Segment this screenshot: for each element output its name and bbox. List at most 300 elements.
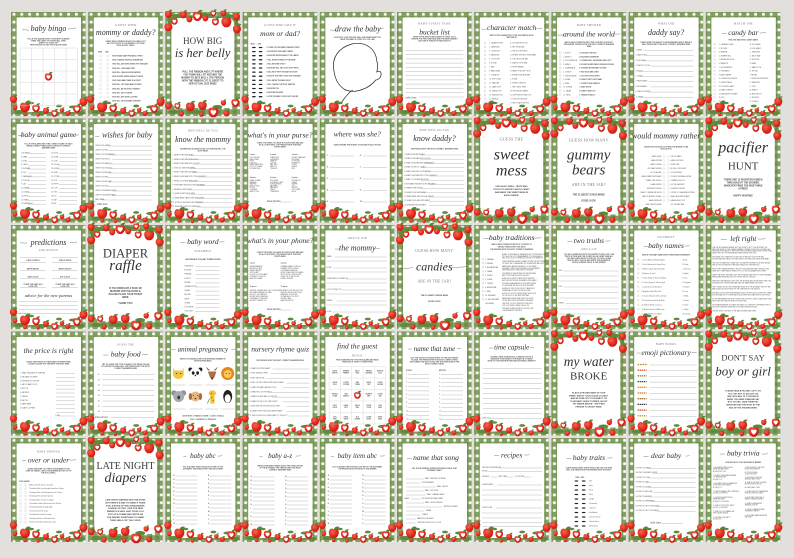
rows: 10. WHAT DOES THE BLACK SHEEP HAVE? bbox=[250, 409, 283, 412]
icon: panda bbox=[188, 368, 202, 379]
wish rows: I HOPE YOU GET YOUR DAD'S bbox=[636, 509, 659, 512]
title: name that tune bbox=[414, 345, 455, 353]
match rows: A. Mia bbox=[683, 258, 687, 262]
point columns: VOICEMAIL MESSAGE bbox=[281, 269, 298, 272]
ruled lines bbox=[406, 50, 464, 97]
panel: dear baby bbox=[628, 438, 706, 543]
instructions: EACH DIAPER. bbox=[504, 194, 519, 197]
question list: WHO CHANGED MORE AS A NEWBORN bbox=[112, 59, 144, 62]
point columns: NAIL POLISH bbox=[250, 184, 260, 187]
answer columns: Q bbox=[285, 488, 287, 490]
instructions: POINTS WINS! bbox=[274, 256, 286, 258]
wish rows: I WISH YOU FEEL... bbox=[95, 176, 110, 178]
point columns: LIPSTICK bbox=[250, 162, 258, 164]
answer columns: D bbox=[251, 488, 253, 490]
answer columns: 2. bbox=[439, 378, 441, 380]
trivia columns: 11. WHAT IS THE MOST COMMON bbox=[745, 481, 766, 484]
point columns: UNREAD EMAILS OVER 20 bbox=[281, 265, 301, 268]
answer columns: P bbox=[208, 483, 210, 485]
title: baby abc bbox=[190, 452, 217, 460]
heading: pacifier bbox=[717, 140, 769, 156]
instructions: ANSWER EACH QUESTION AS YOU SEE AND WILL THE bbox=[180, 148, 226, 150]
words: RPDAIE bbox=[184, 281, 190, 284]
answer columns: B bbox=[173, 479, 175, 481]
question list: I WILL CHANGE THE MOST DIAPERS bbox=[267, 83, 295, 86]
answer columns: K bbox=[251, 516, 253, 518]
choice rows: LISTEN TO GRANDPA ROCKING bbox=[671, 191, 696, 194]
tradition text: AND THE FIRST MONTH CELEBRATED WITH FAMILY bbox=[502, 279, 537, 282]
match rows: L. Wyatt bbox=[683, 308, 689, 311]
answer columns: 7. bbox=[406, 398, 408, 400]
match list: 3. CORDUROY bbox=[489, 50, 501, 52]
instructions: THE CLOSEST GUESS WINS bbox=[421, 295, 449, 297]
trivia columns: 5. HOW MUCH SLEEP DOES A bbox=[713, 496, 732, 499]
bingo grid: LOVES bbox=[378, 394, 383, 396]
fields bbox=[327, 255, 387, 313]
match list: M. HEATH bbox=[750, 89, 758, 92]
bingo grid: SEW bbox=[333, 418, 337, 420]
instructions: BY TASTING OR SMELLING. THE PERSON WITH THE MOST bbox=[102, 365, 151, 368]
trivia columns: A) 2 B) 6 C) 8 bbox=[713, 518, 722, 521]
answer columns: T bbox=[362, 499, 363, 501]
match list: O. MOUNDS bbox=[750, 97, 759, 99]
rows: 8. HOW MANY SIBLINGS DOES SHE HAVE? bbox=[172, 184, 205, 187]
rows: 5. WHAT DOES HE DO FOR WORK? bbox=[404, 170, 431, 173]
country list: 1. CANADA bbox=[485, 258, 495, 261]
heading: BABY'S FIRST YEAR bbox=[418, 22, 451, 26]
answer rows: 14. KANGAROO bbox=[21, 202, 34, 205]
point columns: STICKERS bbox=[270, 180, 278, 182]
answer rows: 13. SWAN bbox=[21, 198, 29, 201]
question list: I AM MORE WILL GET UP AT NIGHT FIRST bbox=[267, 66, 299, 70]
instructions: HOW MUCH DO YOU KNOW ABOUT BABIES bbox=[725, 461, 762, 464]
trait rows bbox=[574, 476, 601, 528]
wish rows: I HOPE YOU SEE bbox=[636, 482, 649, 484]
point columns: SCREENSHOT OF TEXT bbox=[281, 296, 299, 298]
answer rows: 28. EEL bbox=[51, 203, 57, 205]
form: DIRECTIONS: bbox=[482, 507, 493, 509]
instructions: CAN CHECK THINGS OFF AND ENJOY IT bbox=[418, 40, 452, 42]
answer rows: 21. OTTER bbox=[51, 176, 60, 178]
answer columns: V bbox=[285, 508, 287, 510]
tradition text: ON THE FIRST DAY FOR A SWEET LIFE AHEAD bbox=[502, 299, 533, 302]
instructions: THERE ARE 15 PACIFIERS HIDDEN bbox=[724, 178, 763, 182]
instructions: YOUR BABY. WHEN IT FREES, SHOUT bbox=[570, 400, 608, 403]
point columns: MORE THAN ONE THOUSAND bbox=[281, 271, 304, 274]
heading: MATCH THE bbox=[734, 22, 753, 26]
wish rows: I HOPE YOU ALWAYS KNOW bbox=[636, 471, 657, 474]
trivia columns: NEWBORN NEED? bbox=[713, 499, 725, 501]
instructions: FILL IN THE BLANKS WITH THE CORRECT NAME OF EACH bbox=[25, 142, 73, 146]
rows: 1. WHEN IS HIS BIRTHDAY? bbox=[404, 153, 425, 156]
instructions: GOOD LUCK! bbox=[428, 301, 441, 303]
wish rows: I HOPE YOU BECOME bbox=[636, 491, 652, 493]
rows: BABIES IN THE NIGHT bbox=[417, 517, 434, 520]
trivia columns: A) 6 B) 8 C) 12 bbox=[713, 486, 722, 489]
instructions: POINTS WINS! bbox=[274, 146, 286, 148]
answer columns: 3. bbox=[406, 382, 408, 384]
answer columns: J bbox=[251, 512, 252, 514]
heading bbox=[648, 22, 684, 37]
list: D. ELDER WOMEN PASS DOWN ADVICE AND bbox=[579, 63, 615, 66]
tradition text: PLACENTA AFTER THE BIRTH bbox=[502, 309, 522, 312]
fields: LOVE: bbox=[327, 311, 332, 313]
answer columns: T bbox=[208, 499, 209, 501]
instructions: CORRECT ANSWERS WINS bbox=[269, 468, 292, 472]
answer columns: ARTISTS bbox=[439, 369, 446, 372]
question list: I AM MORE SERIOUS ABOUT THE LABOR bbox=[267, 54, 299, 57]
heading bbox=[564, 354, 614, 382]
answer rows: 1. MONKEY bbox=[21, 152, 31, 154]
icon: lion bbox=[221, 367, 234, 380]
panel: know the mommy bbox=[164, 118, 242, 223]
answer columns: J bbox=[328, 511, 329, 513]
bingo grid: YOGA bbox=[367, 406, 372, 409]
trivia columns: 10. HOW MUCH DOES THE bbox=[745, 477, 762, 479]
bingo grid: HAS A bbox=[344, 404, 349, 407]
wish rows: I WISH YOU BECOME... bbox=[95, 181, 113, 183]
answer columns: P bbox=[362, 483, 364, 485]
bingo grid: DRIVES bbox=[332, 394, 338, 396]
answer columns: 11. bbox=[406, 414, 409, 416]
heading: raffle bbox=[109, 258, 142, 274]
instructions: ORIGINATED, PERSON WITH THE MOST CORRECT ANSWERS bbox=[564, 43, 615, 46]
prediction fields: HAIR COLOR bbox=[28, 276, 39, 278]
choice rows: BABY IS A DADDYS BABY bbox=[642, 195, 663, 198]
answer columns: F bbox=[173, 495, 174, 497]
instructions: WHEN YOU HEAR SOMEONE SAY bbox=[727, 398, 760, 401]
match list: A. GOODNIGHT MOON bbox=[510, 42, 528, 44]
icon: koala bbox=[171, 390, 186, 402]
match list: E. SKITTLES bbox=[750, 59, 759, 61]
rows: 11. WHICH DOES FOLLOWED MARY TO SCHOOL? bbox=[250, 414, 288, 417]
answer rows: 9. bbox=[360, 190, 362, 192]
price rows: 10. BABY CLIPPERS bbox=[20, 407, 35, 410]
question list: WHO WILL CRY WHEN BABY IS BORN bbox=[112, 83, 142, 86]
bingo grid: TATTOO bbox=[332, 372, 339, 374]
instructions: USE SIGHT, SMELL, TASTE AND bbox=[496, 185, 528, 188]
icon: apple bbox=[354, 391, 361, 399]
point columns: BOOK bbox=[292, 191, 297, 193]
choice rows bbox=[640, 155, 696, 206]
trivia columns: A) 10 B) 14 C) 18 HOURS bbox=[713, 500, 729, 503]
tradition text: OF THE CHILD ON THE FIRST BIRTHDAY bbox=[502, 294, 529, 297]
bingo grid: CAT bbox=[367, 383, 370, 386]
match list: I. PAYDAY bbox=[750, 73, 758, 76]
point columns: NAIL FILE bbox=[270, 163, 277, 166]
choice rows: GO SHOPPING bbox=[671, 172, 683, 174]
answer columns: F bbox=[251, 496, 252, 498]
rows: 6. WHAT IS HIS FAVORITE TYPE OF MUSIC? bbox=[404, 174, 437, 177]
panel: don't say boy or girl bbox=[705, 329, 782, 437]
match list: 16. HAROLD bbox=[489, 102, 499, 104]
point columns: HAND SANITIZER bbox=[250, 163, 264, 166]
answer rows: 25. OWL bbox=[51, 192, 57, 194]
instructions: TRUTH IS TRUE AND THE OTHER IS A LIE. READ THEM ALL bbox=[565, 255, 613, 258]
point columns: BANDAID bbox=[250, 181, 258, 184]
instructions: FUN. A WORD OF ENCOURAGEMENT, bbox=[106, 504, 145, 507]
panel: what did daddy say bbox=[628, 12, 706, 117]
icon: apple bbox=[45, 72, 53, 81]
trivia columns: 3. HOW MANY TIMES DO BABIES EAT bbox=[713, 482, 737, 485]
instructions: FILL IN THE SQUARES WITH YOUR BEST GUESSES bbox=[27, 38, 70, 40]
answer columns: W bbox=[285, 512, 287, 514]
answer rows: THREE bbox=[558, 302, 564, 304]
wish rows: BABY NAME bbox=[95, 198, 104, 201]
match list: D. WHERE THE WILD THINGS ARE bbox=[510, 54, 536, 56]
match rows: 13. Kate Middleton & William bbox=[642, 312, 663, 316]
story text: RIGHT THEN THE BABY ARRIVED. THE LEFT TWIN CAME FIRST AND THE RIGHT ONE bbox=[712, 268, 769, 270]
tradition text: MOTHERS WEAR A BRACELET WITH A BLUE BEAD bbox=[502, 282, 536, 285]
question list: DAD bbox=[258, 42, 262, 46]
point columns: COINS bbox=[292, 164, 297, 166]
country list: 7. TURKEY bbox=[485, 283, 494, 285]
rows: - WHITNEY HOUSTON TO LOVE bbox=[417, 522, 441, 524]
answer rows: 10. RABBIT bbox=[21, 187, 29, 190]
answer columns: Z bbox=[285, 524, 286, 526]
instructions: PLAYED. THE PERSON WITH THE MOST CORRECT WINS bbox=[411, 358, 458, 362]
point columns: CHAPSTICK bbox=[270, 156, 280, 159]
story text: THE NURSE TOOK THEM RIGHT TO A ROOM ON THE LEFT SIDE OF THE HALL. bbox=[712, 256, 765, 258]
panel: recipes bbox=[473, 438, 551, 543]
instructions: UNSCRAMBLE THE BABY THEMED WORDS bbox=[185, 258, 222, 261]
story text: THE END. ENJOY THE REST OF THE BABY SHOWER RIGHT HERE. bbox=[712, 310, 757, 312]
answer columns: R bbox=[208, 491, 210, 493]
panel: late night diapers bbox=[87, 435, 164, 543]
story text: NOTHING WAS LEFT TO WORRY ABOUT AND EVERYTHING WAS RIGHT IN THE WORLD. bbox=[712, 293, 771, 296]
match list: 13. BABY CHEEKS bbox=[719, 89, 733, 92]
list: 2. MEXICO bbox=[563, 56, 572, 58]
point columns: 3 points bbox=[292, 153, 298, 156]
answer rows: 2. bbox=[327, 166, 329, 168]
question list: WHO HAS A BABY NAME IN A CRAZY bbox=[112, 79, 142, 82]
prediction fields: I THINK THE BABY WILL bbox=[55, 283, 75, 286]
match list: K. PURPLE CRAYON bbox=[510, 82, 527, 84]
tradition text: BABIES ARE GIVEN A SMALL TASTE OF HONEY bbox=[502, 297, 534, 300]
answer columns bbox=[328, 474, 386, 525]
panel: the price is right bbox=[10, 332, 88, 436]
trivia columns: 14. WHAT IS A NEWBORN'S bbox=[745, 502, 762, 505]
bingo grid: HAS A bbox=[332, 370, 338, 372]
bingo grid: GUITAR bbox=[377, 383, 384, 386]
answer columns: U bbox=[362, 503, 364, 505]
point columns: CONTACT FOR MOM bbox=[250, 275, 266, 278]
instructions: WHAT THE GUEST OF HONOR WILL OPEN bbox=[31, 40, 66, 42]
rows bbox=[172, 154, 232, 208]
words: QUAREN STYLE bbox=[184, 285, 197, 288]
point columns: SAFETY PIN bbox=[250, 190, 260, 193]
title: baby a-z bbox=[268, 452, 292, 460]
match list: 6. PARENTS bbox=[719, 62, 728, 65]
rows: 1. WHAT IS HER BIRTHDAY? bbox=[172, 154, 194, 156]
heading: GUESS WHO bbox=[115, 23, 137, 27]
title: what's in your purse? bbox=[248, 130, 313, 140]
instructions: CHECK THE ITEMS YOU HAVE IN YOUR PURSE AND ADD bbox=[257, 142, 304, 144]
instructions: LOOK INTO YOUR CRYSTAL BALL AND DRAW WHAT YOU bbox=[334, 36, 382, 39]
answer rows bbox=[21, 152, 77, 205]
rows: 10. WHAT IS HIS SHOE SIZE? bbox=[404, 191, 426, 194]
heading: diapers bbox=[104, 471, 147, 486]
match list: 8. TWIN BARS bbox=[719, 70, 729, 73]
prediction fields bbox=[20, 258, 78, 288]
instructions: WHO NAMES THE MOST SONG AND THE PERSON WITH THE bbox=[410, 360, 460, 364]
instructions: IF YOU BROUGHT A PACK OF bbox=[109, 287, 142, 290]
instructions: DAD, PERSON WITH THE MOST CORRECT ANSWERS WINS bbox=[642, 43, 691, 46]
match list: 2. JANUSZKA bbox=[489, 46, 500, 48]
heading: bucket list bbox=[419, 28, 451, 36]
answer columns: F bbox=[328, 495, 329, 497]
heading: GUESS THE bbox=[117, 344, 134, 346]
answer columns: 6. bbox=[406, 394, 408, 396]
point columns: 15 points bbox=[281, 285, 288, 288]
panel: baby traditions bbox=[473, 225, 551, 330]
instructions: THEM SMILE OFF THE CUSHY. bbox=[110, 520, 142, 522]
point columns: GIFT CARD bbox=[292, 188, 301, 191]
answer rows: 3. bbox=[327, 178, 329, 180]
trivia columns: A) 100 B) 200 C) 300 bbox=[713, 470, 726, 473]
answer columns: 1. bbox=[406, 374, 408, 376]
match rows: E. Suri bbox=[683, 278, 688, 280]
heading: mom or dad? bbox=[260, 29, 300, 38]
bingo grid: HAS A bbox=[344, 416, 349, 418]
question list: MOM bbox=[251, 44, 255, 46]
title: wishes for baby bbox=[102, 130, 153, 140]
match rows: 2. Kim Kardashian & Kanye West bbox=[642, 263, 666, 266]
instructions: PERSON TO SHOUT WINS! bbox=[576, 406, 602, 408]
heading: predictions bbox=[30, 238, 66, 247]
match list: B. PAT THE BUNNY bbox=[510, 46, 526, 48]
trait rows: Sleep Sense bbox=[589, 526, 598, 528]
instructions: GUESS WHAT THE DADDY-TO-BE ANSWERED ABOUT BEING A bbox=[640, 41, 693, 44]
prediction fields: BIRTH LENGTH bbox=[59, 268, 72, 270]
answer rows bbox=[95, 374, 154, 419]
answer columns: H bbox=[328, 503, 330, 505]
bingo grid: ONLY bbox=[333, 405, 337, 407]
rows: 2. WHAT IS HER FAVORITE FOOD? bbox=[172, 158, 199, 161]
instructions: ANIMAL'S BABY. PERSON WITH THE MOST CORRECT bbox=[26, 144, 71, 148]
answer rows: 3. GOAT bbox=[21, 159, 27, 162]
heading: HUNT bbox=[728, 160, 759, 172]
instructions: END OF THE SHOWER WINS! bbox=[729, 407, 757, 409]
tradition text: THE FAMILY MAKES A TREE OF LIFE WITH THE bbox=[502, 307, 533, 310]
match list: 3. MINERAL bbox=[719, 51, 728, 54]
price rows: TOTAL bbox=[55, 414, 60, 417]
rows: 3. WHAT IS HIS FAVORITE BREAKFAST? bbox=[404, 161, 434, 164]
prediction fields: EYE COLOR bbox=[60, 276, 71, 278]
match list: 12. LAMB CHOP bbox=[489, 86, 501, 88]
answer columns: W bbox=[208, 511, 210, 513]
point columns: SNACK bbox=[292, 165, 298, 168]
instructions: THINK THE BABY IS GOING TO LOOK LIKE bbox=[340, 38, 376, 41]
form: PREP TIME: bbox=[498, 476, 508, 478]
icon: penguin bbox=[223, 390, 232, 403]
match list: A. 100 GRAND bbox=[750, 43, 761, 46]
point columns: INSTAGRAM APP bbox=[250, 265, 263, 268]
match list: 4. SHARPIE BILL bbox=[719, 54, 731, 57]
heading: know the mommy bbox=[175, 135, 231, 144]
country list: 9. ITALY bbox=[485, 290, 492, 293]
point columns: MATCHES bbox=[270, 186, 278, 189]
heading bbox=[644, 236, 690, 250]
rows: OVER bbox=[19, 481, 24, 483]
answer columns: Y bbox=[362, 519, 364, 521]
trivia columns: 1. HOW MANY BONES DOES A bbox=[713, 466, 733, 469]
form: SERVES: bbox=[482, 476, 490, 478]
story text: THEY KNEW THIS WAS THE RIGHT LIFE FOR THEM. bbox=[712, 299, 747, 302]
rows: 4. WHO ON THE THREE BLIND MICE CHASE? bbox=[250, 381, 284, 384]
choice rows: HAVE COFFEE bbox=[650, 163, 662, 166]
panel: guess the sweet mess bbox=[473, 116, 550, 224]
instructions bbox=[421, 295, 449, 303]
instructions: CONTAINS "BABY" bbox=[427, 469, 442, 472]
country list: SRI LANKA bbox=[485, 302, 494, 305]
rows: 9. WHO HAD THE MOUSE RUN UP THE? bbox=[250, 405, 280, 408]
instructions: FIRST PERSON TO GET FIVE IN A ROW WINS! bbox=[30, 44, 68, 46]
tradition text: EVERY NEWBORN'S HEAD IS SHAVED WITHIN THE FIRST WEEKS bbox=[502, 260, 546, 263]
bingo grid bbox=[329, 366, 386, 424]
wish rows: I WISH YOU EXPERIENCE... bbox=[95, 154, 117, 156]
answer rows: 19. HORSE bbox=[51, 168, 59, 170]
heading: DON'T SAY bbox=[721, 352, 765, 362]
story text: ONE DAY, MOTHER AND FATHER LEFT THE HOUSE TO GO TO THE HOSPITAL. THE bbox=[712, 246, 767, 249]
prediction fields: TIME OF BIRTH bbox=[59, 260, 72, 262]
list: C. WOMEN ONLY GATHERING AND GIFTS bbox=[579, 59, 611, 62]
wish rows: I HOPE YOU LOVE bbox=[636, 477, 650, 479]
words bbox=[184, 264, 219, 313]
answer rows: 10. NAME: bbox=[636, 95, 644, 98]
point columns: RECEIPTS bbox=[292, 162, 300, 164]
instructions: THE DIAPER SOMETHING TO MAKE bbox=[107, 516, 145, 519]
heading: GUESS HOW MANY bbox=[569, 138, 609, 142]
choice rows: HAVE KIDS NOW bbox=[671, 159, 684, 162]
heading: ARE IN THE JAR? bbox=[417, 280, 451, 284]
answer rows: 18. GOOSE bbox=[51, 164, 60, 166]
instructions: GUESS THE CHOICES YOU THINK THE MOMMY-TO-BE bbox=[644, 146, 689, 148]
story text: SO THE NEW PARENTS SAT RIGHT DOWN. THEY LEFT THE LIGHTS ON AND RIGHT THEN bbox=[712, 298, 772, 300]
answer rows: 4. bbox=[327, 188, 329, 192]
panel: bucket list bbox=[396, 12, 474, 117]
instructions: GUESS WHICH PARENT WOULD DO THINGS, PUT bbox=[106, 40, 147, 43]
heading: bears bbox=[572, 162, 606, 178]
panel: guess the baby food bbox=[87, 332, 165, 436]
heading: mommy or daddy? bbox=[96, 28, 155, 37]
rows: 4. WHAT DID HE DO TODAY? bbox=[404, 166, 426, 169]
point columns: BABY REGISTRY bbox=[281, 299, 294, 302]
choice rows: READ TO NEWBORN SHOW bbox=[640, 191, 662, 194]
rows: BABY - BEYONCE bbox=[425, 489, 438, 492]
trait rows: Personality bbox=[589, 502, 597, 505]
answer columns: M bbox=[328, 523, 330, 525]
rows: 10. WHAT IS HER SHOE SIZE? bbox=[172, 192, 195, 195]
match list: D. MILKY WAY bbox=[750, 54, 761, 57]
match list: B. LIFE SAVER bbox=[750, 47, 762, 50]
point columns: 10 points bbox=[250, 285, 257, 288]
instructions: CHECK THE ITEMS YOU HAVE IN YOUR PHONE AND ADD bbox=[257, 251, 304, 254]
bingo grid: CAN bbox=[378, 404, 382, 407]
instructions: WRITE IN THE FIRST THINGS BABY IS GOING TO DO bbox=[413, 36, 457, 38]
rows: The baby will be 7 inches in length bbox=[29, 498, 53, 501]
rows: - QUEEN bbox=[421, 514, 428, 516]
match list: P. CRUNCH bbox=[750, 101, 759, 103]
heading: WHAT DID bbox=[658, 22, 675, 26]
list bbox=[559, 52, 615, 96]
rows: BABY - MARIAH CAREY bbox=[427, 493, 446, 496]
point columns: PACIFIER bbox=[270, 184, 278, 187]
heading bbox=[175, 36, 231, 60]
panel: advice for the mommy bbox=[319, 225, 397, 330]
fields: NAME: bbox=[327, 255, 332, 258]
heading: around the world bbox=[563, 30, 615, 38]
